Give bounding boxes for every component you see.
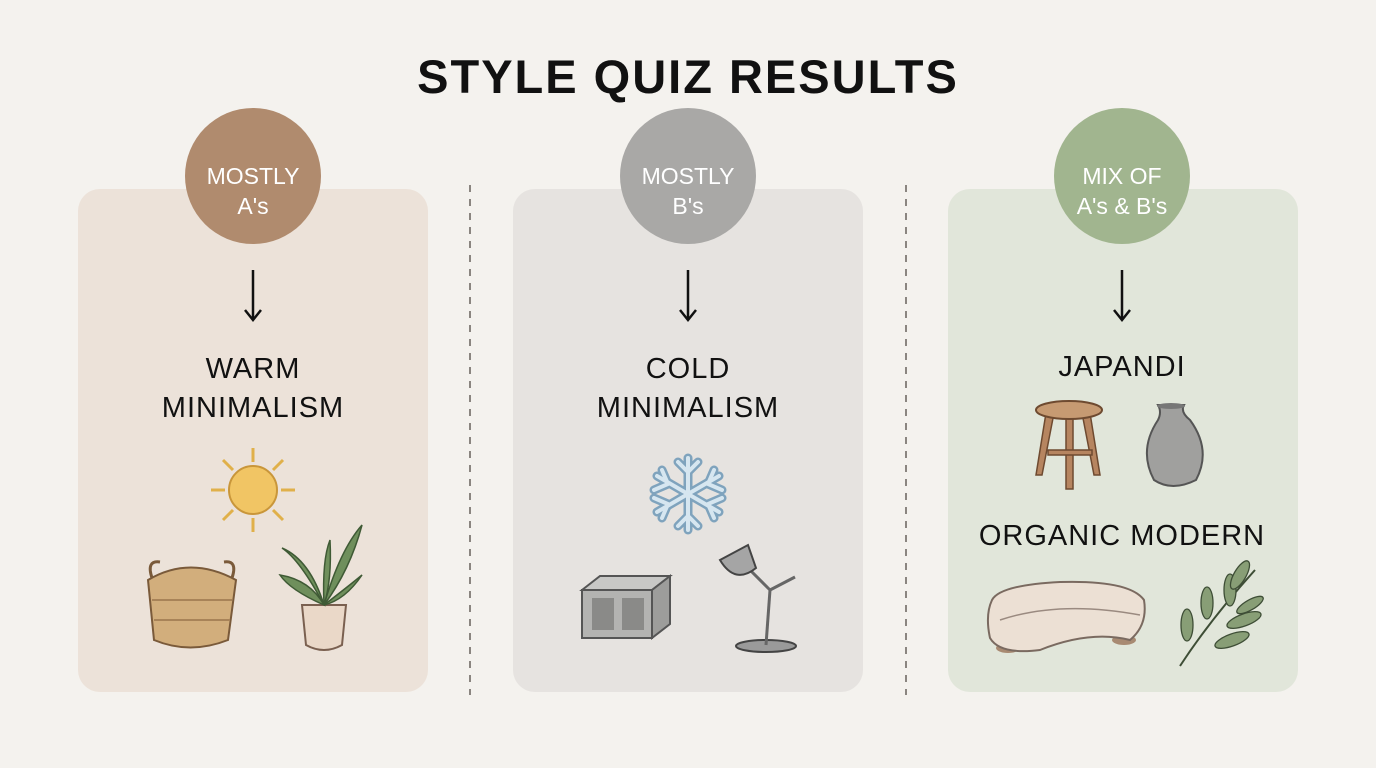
heading: warm minimalism: WARM <box>206 353 300 385</box>
badge: mostly A's: A's <box>237 193 269 219</box>
heading: japandi: JAPANDI <box>1058 351 1186 383</box>
badge: mostly B's: MOSTLY <box>642 163 734 189</box>
icon: vase <box>1147 403 1203 486</box>
heading: cold minimalism: COLD <box>646 353 730 385</box>
panel: cold minimalism <box>513 108 863 692</box>
icon: plant <box>280 525 362 650</box>
icon: cinder block <box>582 576 670 638</box>
icon: snowflake <box>654 458 722 530</box>
heading: warm minimalism: MINIMALISM <box>162 392 344 424</box>
heading: organic modern: ORGANIC MODERN <box>979 520 1265 552</box>
badge: mostly A's: MOSTLY <box>207 163 299 189</box>
icon: curved sofa <box>988 582 1145 653</box>
panel: warm minimalism <box>78 108 428 692</box>
title: STYLE QUIZ RESULTS <box>417 50 959 103</box>
heading: cold minimalism <box>597 353 779 424</box>
arrow <box>1114 270 1130 320</box>
badge: mix of A's & B's <box>1054 108 1190 244</box>
panel: japandi / organic modern <box>948 108 1298 692</box>
icon: basket <box>148 562 236 648</box>
badge: mix of A's & B's: A's & B's <box>1077 193 1167 219</box>
icon: stool <box>1036 401 1102 489</box>
badge: mix of A's & B's: MIX OF <box>1082 163 1162 189</box>
badge: mostly B's <box>620 108 756 244</box>
arrow <box>680 270 696 320</box>
arrow <box>245 270 261 320</box>
badge: mostly B's: B's <box>672 193 704 219</box>
badge: mostly A's <box>185 108 321 244</box>
heading: warm minimalism <box>162 353 344 424</box>
icon: leaf branch <box>1180 558 1265 666</box>
icon: desk lamp <box>720 545 796 652</box>
icon: sun <box>211 448 295 532</box>
heading: cold minimalism: MINIMALISM <box>597 392 779 424</box>
